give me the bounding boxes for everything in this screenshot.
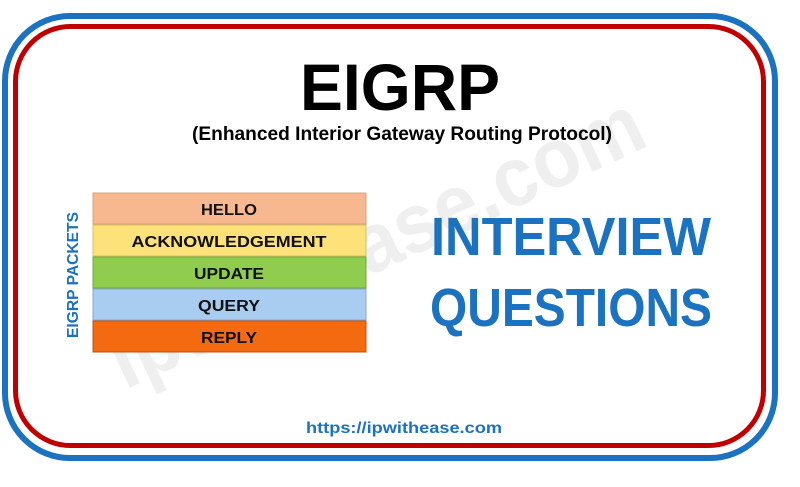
packet: QUERY [93, 289, 366, 320]
packet: ACKNOWLEDGEMENT: ACKNOWLEDGEMENT [132, 234, 327, 251]
packet: REPLY [93, 321, 366, 352]
packet: HELLO: HELLO [201, 202, 257, 219]
heading: INTERVIEW QUESTIONS: QUESTIONS [430, 278, 712, 338]
vertical label: EIGRP PACKETS: EIGRP PACKETS [65, 212, 82, 338]
title: EIGRP [300, 50, 500, 124]
packet: REPLY: REPLY [201, 330, 257, 347]
heading: INTERVIEW QUESTIONS [430, 207, 712, 338]
url: https://ipwithease.com [306, 420, 502, 437]
subtitle: (Enhanced Interior Gateway Routing Protocol) [192, 124, 612, 145]
heading: INTERVIEW QUESTIONS: INTERVIEW [431, 207, 711, 267]
packet: HELLO [93, 193, 366, 224]
packet: ACKNOWLEDGEMENT [93, 225, 366, 256]
packet: QUERY: QUERY [198, 298, 260, 315]
packet: UPDATE: UPDATE [194, 266, 264, 283]
watermark: ipwithease.com [93, 76, 658, 406]
packet stack [93, 193, 366, 352]
packet: UPDATE [93, 257, 366, 288]
